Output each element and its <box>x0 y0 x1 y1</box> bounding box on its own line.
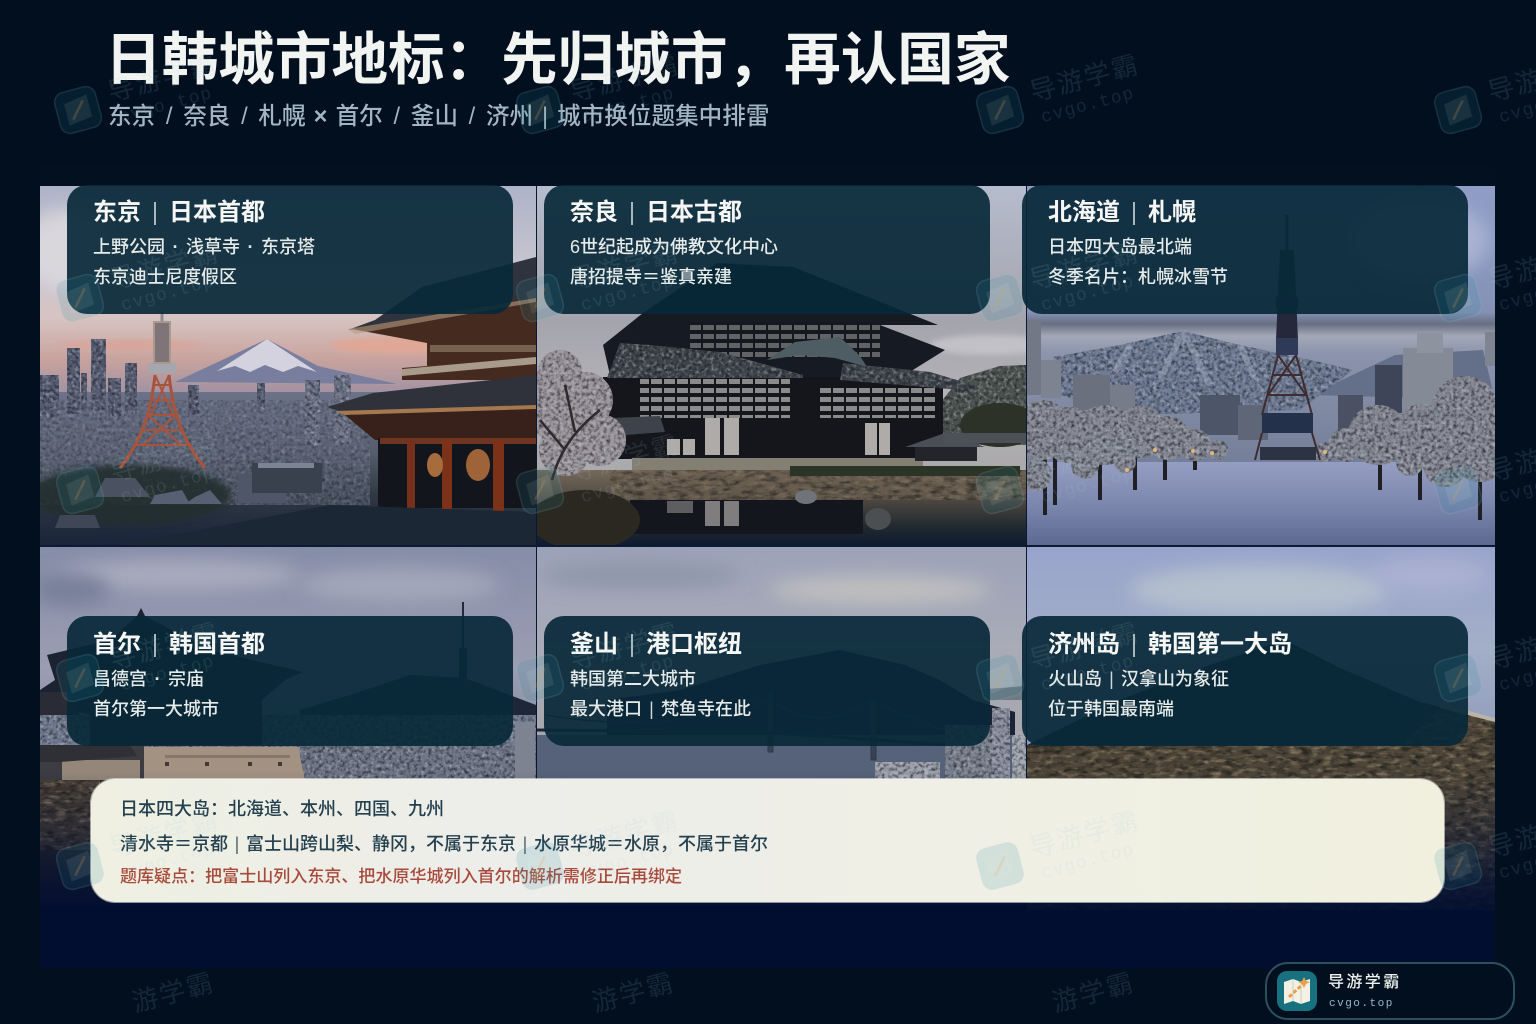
landmarks: · <box>248 237 254 257</box>
bridge <box>537 714 945 760</box>
watermark layer: 导游学霸 <box>107 617 223 675</box>
note line 2: 清水寺＝京都 富士山跨山梨、静冈，不属于东京 水原华城＝水原，不属于首尔 <box>120 834 768 854</box>
mountain <box>607 650 1015 735</box>
watermark layer: cvgo.top <box>579 464 677 508</box>
note line 2: | <box>235 834 239 854</box>
low buildings <box>30 463 322 528</box>
ground <box>1027 703 1495 910</box>
fact 2: 冬季名片：札幌冰雪节 <box>1048 267 1228 287</box>
Tokyo Tower <box>120 312 205 468</box>
watermark layer: 导游学霸 <box>105 49 221 107</box>
fact 1: 火山岛 汉拿山为象征 <box>1048 669 1229 689</box>
pond <box>630 490 891 534</box>
heading: 奈良 日本古都 <box>570 199 742 226</box>
card: Busan <box>544 616 990 746</box>
landmarks: · <box>172 237 178 257</box>
watermark layer: cvgo.top <box>119 272 217 316</box>
watermark layer: cvgo.top <box>579 840 677 884</box>
heading: | <box>1131 198 1137 226</box>
fact 1: 韩国第二大城市 <box>570 669 696 689</box>
watermark layer: cvgo.top <box>1039 272 1137 316</box>
fact 2: 唐招提寺＝鉴真亲建 <box>570 267 732 287</box>
watermark layer: cvgo.top <box>119 652 217 696</box>
cherry tree <box>537 350 640 545</box>
watermark layer: cvgo.top <box>1039 84 1137 128</box>
fact: 首尔第一大城市 <box>93 699 219 719</box>
watermark layer: 导游学霸 <box>107 237 223 295</box>
subtitle: / <box>393 104 400 130</box>
palace silhouette <box>40 608 303 745</box>
hall <box>603 263 977 470</box>
photo: Busan harbour and bridge <box>537 547 1026 779</box>
small hall <box>905 433 1026 461</box>
watermark layer: 游学霸 <box>1049 967 1138 1018</box>
snowy trees right <box>1315 376 1512 520</box>
Hallasan <box>1027 641 1440 745</box>
water <box>537 735 1012 779</box>
brand name: 导游学霸 <box>1328 974 1402 991</box>
heading: 济州岛 韩国第一大岛 <box>1048 631 1292 658</box>
skyscrapers <box>40 339 351 445</box>
subtitle: / <box>166 104 172 130</box>
watermark layer: 导游学霸 <box>1027 617 1143 675</box>
heading: 首尔 韩国首都 <box>93 631 265 658</box>
fact 2: | <box>649 699 654 719</box>
heading: | <box>629 630 635 658</box>
watermark layer: 导游学霸 <box>567 49 683 107</box>
mountains <box>1053 331 1495 415</box>
photo: Tokyo skyline, Fuji and temple gate <box>20 186 536 545</box>
note line 2: | <box>523 834 527 854</box>
watermark layer: cvgo.top <box>579 652 677 696</box>
heading: 釜山 港口枢纽 <box>570 631 742 658</box>
snowy trees left <box>1012 400 1228 515</box>
heading: | <box>152 198 158 226</box>
card: Jeju <box>1022 616 1468 746</box>
brand url: cvgo.top <box>1329 998 1394 1010</box>
heading: 东京 日本首都 <box>93 199 265 226</box>
watermark layer: 导游学霸 <box>567 805 683 863</box>
card: Hokkaido Sapporo <box>1022 185 1468 314</box>
watermark layer: 导游学霸 <box>1027 49 1143 107</box>
watermark layer: 导游学霸 <box>567 617 683 675</box>
watermark layer: 导游学霸 <box>1027 429 1143 487</box>
subtitle: 东京 奈良 札幌 首尔 釜山 济州 城市换位题集中排雷 <box>108 104 769 130</box>
brand badge <box>1265 962 1515 1020</box>
card: Nara <box>544 185 990 314</box>
photo: Jeju Hallasan and lava field <box>1027 547 1495 910</box>
landmarks: · <box>154 669 160 689</box>
watermark layer: 导游学霸 <box>567 237 683 295</box>
fact 1: 日本四大岛最北端 <box>1048 237 1192 257</box>
watermark layer: cvgo.top <box>1039 464 1137 508</box>
Mount Fuji <box>175 339 397 384</box>
card: Tokyo <box>67 185 513 314</box>
N Seoul Tower and hill <box>300 602 536 715</box>
watermark layer: 导游学霸 <box>567 429 683 487</box>
photo: Nara great hall and pond <box>527 186 1050 550</box>
heading: | <box>152 630 158 658</box>
high-rises <box>875 708 1026 780</box>
snow ground <box>1027 462 1495 545</box>
watermark layer: cvgo.top <box>579 272 677 316</box>
watermark layer: cvgo.top <box>1039 652 1137 696</box>
fact 2: 最大港口 梵鱼寺在此 <box>570 699 751 719</box>
landmarks: 昌德宫 宗庙 <box>93 669 204 689</box>
subtitle: / <box>469 104 475 130</box>
fact 1: | <box>1109 669 1114 689</box>
watermark layer: 游学霸 <box>589 967 678 1018</box>
heading: 北海道 札幌 <box>1048 199 1196 226</box>
note line 1: 日本四大岛：北海道、本州、四国、九州 <box>120 799 444 819</box>
callout: exam notes <box>91 779 1444 902</box>
watermark layer: cvgo.top <box>119 464 217 508</box>
fact 1: 6世纪起成为佛教文化中心 <box>570 237 778 257</box>
subtitle: × <box>314 104 327 130</box>
watermark layer: 导游学霸 <box>107 429 223 487</box>
watermark layer: cvgo.top <box>119 840 217 884</box>
city buildings <box>1027 320 1495 440</box>
photo: Seoul palace and city <box>30 547 536 905</box>
watermark layer: 导游学霸 <box>1027 237 1143 295</box>
title: 日韩城市地标：先归城市，再认国家 <box>105 28 1010 91</box>
photo: Sapporo TV tower and snowy park <box>1012 186 1512 545</box>
temple gate <box>243 257 536 522</box>
photo grid <box>40 186 1495 968</box>
card: Seoul <box>67 616 513 746</box>
watermark layer: 游学霸 <box>129 967 218 1018</box>
landmarks: 上野公园 浅草寺 东京塔 <box>93 237 315 257</box>
watermark layer: cvgo.top <box>579 84 677 128</box>
warning line: 题库疑点：把富士山列入东京、把水原华城列入首尔的解析需修正后再绑定 <box>120 867 682 886</box>
watermark layer: cvgo.top <box>1039 840 1137 884</box>
watermark layer: 导游学霸 <box>1027 805 1143 863</box>
fact 2: 位于韩国最南端 <box>1048 699 1174 719</box>
watermark layer: 导游学霸 <box>107 805 223 863</box>
hills <box>943 365 1026 447</box>
heading: | <box>629 198 635 226</box>
watermark layer: cvgo.top <box>117 84 215 128</box>
icon: map logo <box>1277 971 1317 1011</box>
subtitle: | <box>542 104 548 130</box>
landmark line 2: 东京迪士尼度假区 <box>93 267 237 287</box>
subtitle: / <box>241 104 248 130</box>
fortress wall <box>40 745 305 780</box>
heading: | <box>1131 630 1137 658</box>
Sapporo TV tower <box>1255 215 1320 460</box>
